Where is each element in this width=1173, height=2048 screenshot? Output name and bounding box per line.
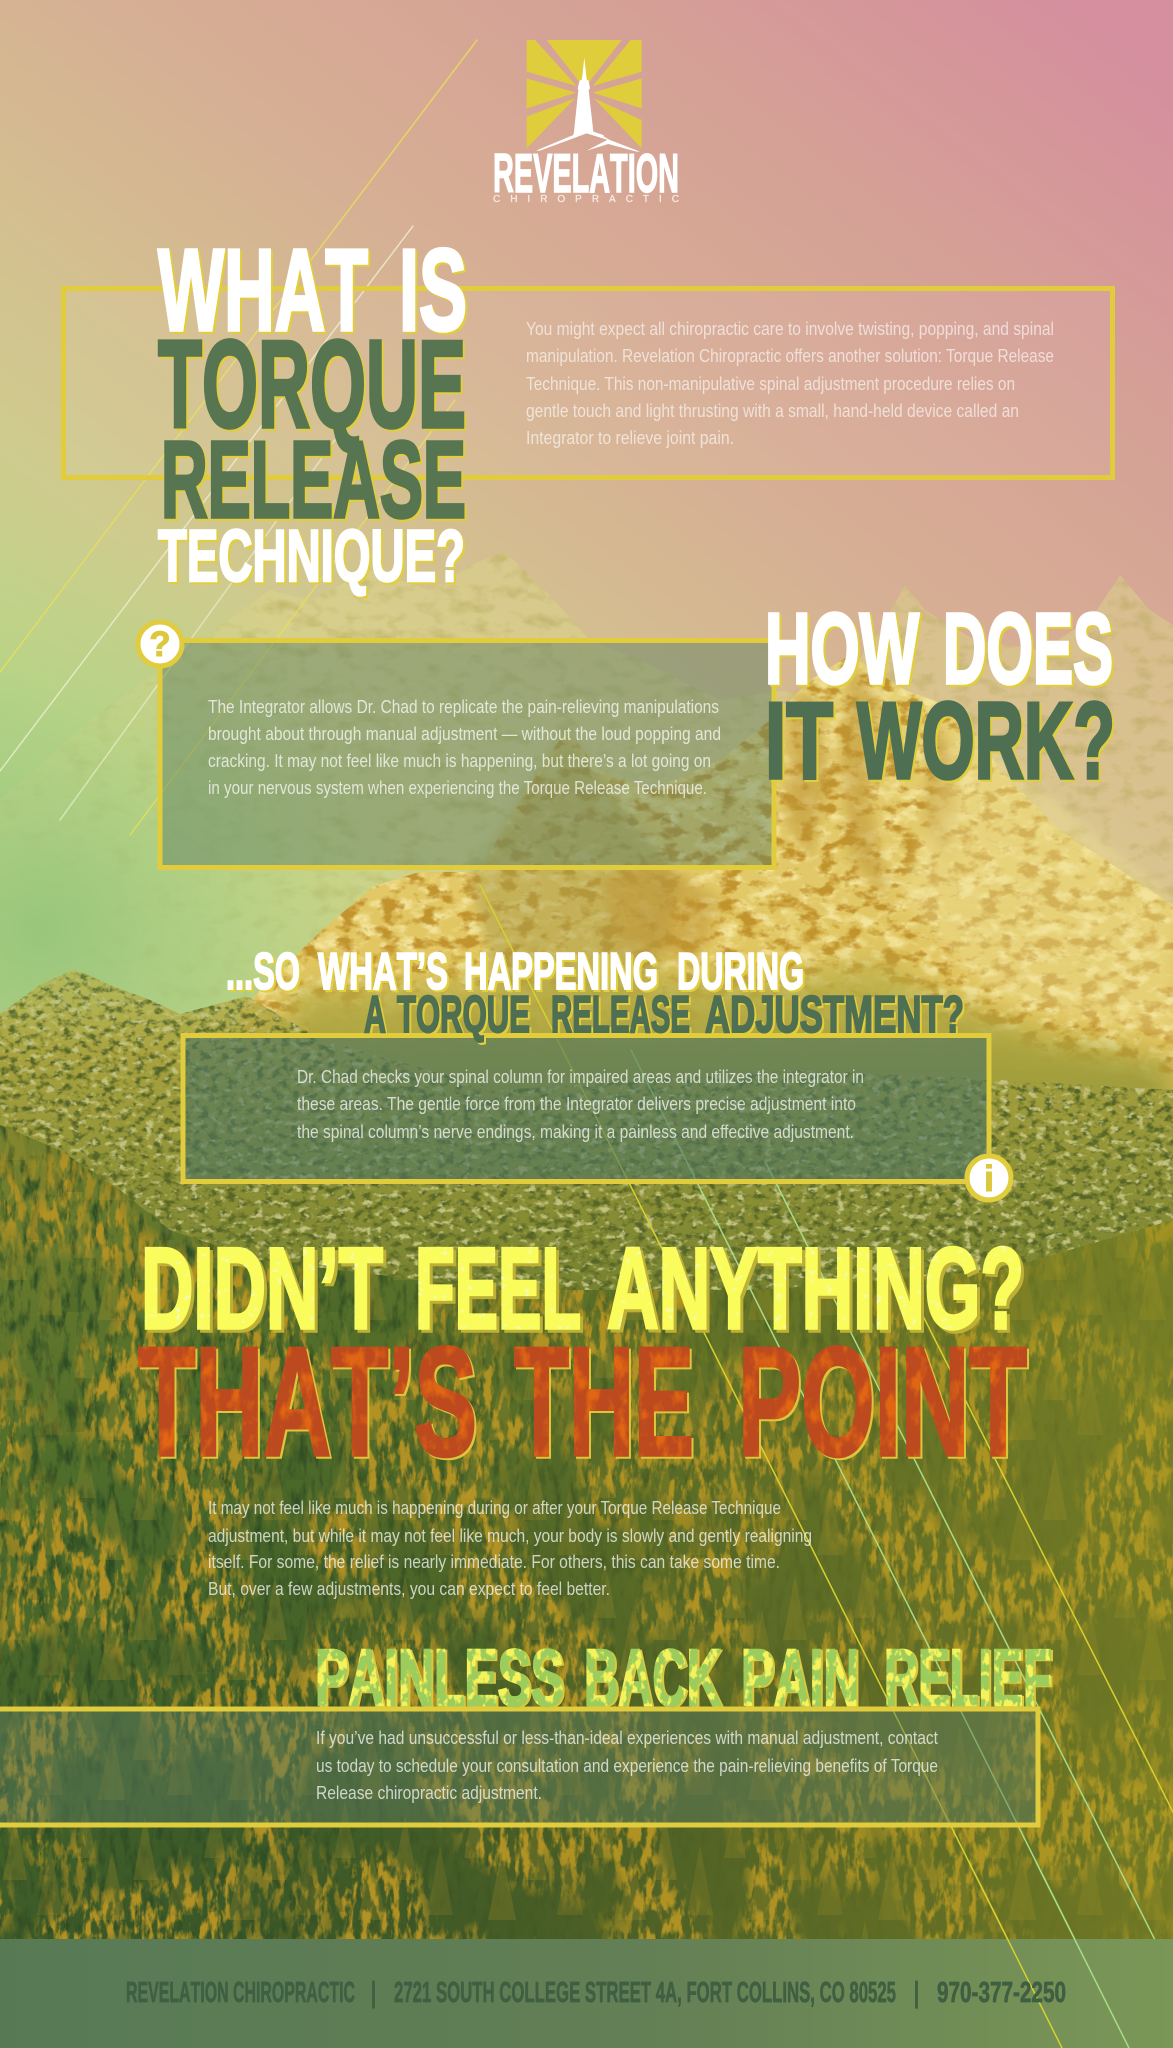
adjustment paragraph: Dr. Chad checks your spinal column for impaired areas and utilizes the integrator in [297,1066,864,1087]
paragraph: didn't feel anything: adjustment, but while it may not feel like much, your body is slowly and gently realigning [208,1525,812,1546]
how it works paragraph [208,696,721,798]
footer contact details: | [914,1977,919,2009]
heading: what's happening: WHAT’S [318,943,448,1001]
closing paragraph: us today to schedule your consultation and experience the pain-relieving benefits of Torque [316,1755,938,1776]
logo: Revelation Chiropractic: REVELATION [493,142,679,204]
how it works paragraph: brought about through manual adjustment — without the loud popping and [208,723,721,744]
heading: what is torque release technique: RELEASE [161,419,466,541]
heading: what's happening: DURING [677,943,804,1001]
icon: question mark [138,622,182,666]
heading: what's happening: A [364,986,386,1044]
how it works paragraph: The Integrator allows Dr. Chad to replicate the pain-relieving manipulations [208,696,719,717]
intro paragraph: You might expect all chiropractic care to involve twisting, popping, and spinal [526,318,1054,339]
heading: what is torque release technique: IS [399,225,467,355]
adjustment paragraph: the spinal column’s nerve endings, making it a painless and effective adjustment. [297,1121,854,1142]
panel: what's happening during an adjustment [183,943,1011,1200]
panel: how does it work [138,593,1115,868]
heading: painless back pain relief [315,1633,1052,1722]
logo: Revelation Chiropractic [493,40,679,205]
heading: what's happening [226,943,964,1044]
footer contact details [126,1977,1066,2009]
paragraph: didn't feel anything: But, over a few adjustments, you can expect to feel better. [208,1578,610,1599]
logo: Revelation Chiropractic: CHIROPRACTIC [493,194,679,205]
heading: what's happening: RELEASE [551,986,690,1044]
closing paragraph: If you’ve had unsuccessful or less-than-ideal experiences with manual adjustment, contact [316,1727,938,1748]
footer band [0,1862,1173,2048]
heading: painless back pain relief: PAIN [741,1633,859,1722]
icon: information [967,1156,1011,1200]
heading: that's the point: THE [514,1315,694,1488]
how it works paragraph: cracking. It may not feel like much is happening, but there’s a lot going on [208,750,711,771]
footer contact details: | [371,1977,376,2009]
paragraph: didn't feel anything [208,1497,812,1599]
heading: that's the point [138,1315,1027,1488]
closing paragraph: Release chiropractic adjustment. [316,1782,542,1803]
heading: how does it work: IT [765,680,833,802]
heading: didn't feel anything: FEEL [415,1225,581,1353]
heading: what is torque release technique: TORQUE [158,316,466,454]
paragraph: didn't feel anything: itself. For some, the relief is nearly immediate. For others, this can take some time. [208,1551,780,1572]
heading: what is torque release technique: TECHNIQUE? [158,516,465,597]
heading: what's happening: TORQUE [397,986,530,1044]
heading: what is torque release technique [158,225,467,597]
closing paragraph [316,1727,938,1803]
heading: that's the point: THAT’S [138,1315,477,1488]
intro paragraph: gentle touch and light thrusting with a small, hand-held device called an [526,400,1019,421]
heading: what's happening: ADJUSTMENT? [705,986,964,1044]
heading: what's happening: HAPPENING [464,943,658,1001]
panel: what is torque release technique [64,225,1112,597]
paragraph: didn't feel anything: It may not feel like much is happening during or after your Torque Release Technique [208,1497,781,1518]
icon: question mark: ? [149,625,171,664]
intro paragraph: Technique. This non-manipulative spinal adjustment procedure relies on [526,373,1015,394]
icon: information: i [984,1158,994,1199]
footer contact details: REVELATION CHIROPRACTIC [126,1977,355,2009]
intro paragraph: Integrator to relieve joint pain. [526,427,734,448]
footer contact details: 970-377-2250 [937,1977,1066,2009]
adjustment paragraph: these areas. The gentle force from the Integrator delivers precise adjustment into [297,1093,856,1114]
heading: painless back pain relief: PAINLESS [315,1633,564,1722]
intro paragraph: manipulation. Revelation Chiropractic offers another solution: Torque Release [526,345,1054,366]
adjustment paragraph [297,1066,864,1142]
heading: didn't feel anything: DIDN’T [141,1225,383,1353]
heading: painless back pain relief: BACK [584,1633,721,1722]
heading: how does it work [765,593,1115,802]
how it works paragraph: in your nervous system when experiencing the Torque Release Technique. [208,777,707,798]
heading: didn't feel anything [141,1225,1024,1353]
heading: what is torque release technique: WHAT [158,225,368,355]
heading: what's happening: ...SO [226,943,300,1001]
panel: painless back pain relief [0,1633,1052,1825]
heading: painless back pain relief: RELIEF [884,1633,1052,1722]
intro paragraph [526,318,1054,448]
heading: how does it work: HOW [765,593,919,705]
